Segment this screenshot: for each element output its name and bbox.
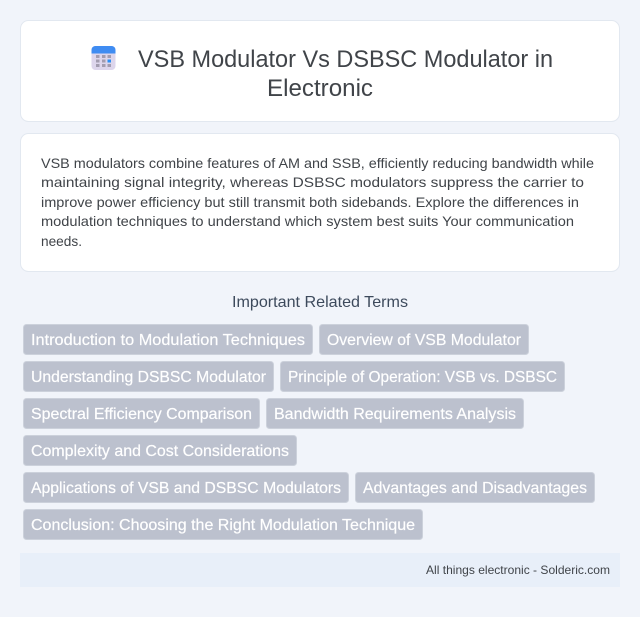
text block: description: maintaining signal integrity, whereas DSBSC modulators suppress the carrier to	[41, 174, 584, 190]
tag: Advantages and Disadvantages	[363, 480, 587, 497]
tag	[356, 472, 594, 502]
text block: description: needs.	[41, 233, 82, 249]
text block: description: modulation techniques to understand which system best suits Your communication	[41, 213, 574, 229]
tag	[320, 324, 528, 354]
icon: calendar	[92, 46, 116, 70]
tag: Understanding DSBSC Modulator	[31, 369, 267, 386]
tag: Overview of VSB Modulator	[327, 332, 522, 349]
text block: description	[41, 155, 594, 249]
panel: description	[20, 134, 620, 272]
tag	[280, 362, 564, 392]
tag	[24, 398, 260, 428]
tag	[24, 436, 296, 466]
heading: title: Electronic	[267, 75, 373, 102]
heading: important related terms: Important Related Terms	[232, 294, 408, 311]
tag: Spectral Efficiency Comparison	[31, 406, 252, 423]
heading: title	[138, 46, 553, 102]
text block: description: VSB modulators combine features of AM and SSB, efficiently reducing bandwidth while	[41, 155, 594, 171]
tag: Complexity and Cost Considerations	[31, 443, 289, 460]
panel: title card	[20, 20, 620, 122]
tag	[24, 472, 348, 502]
heading: title: VSB Modulator Vs DSBSC Modulator in	[138, 46, 553, 73]
tag	[24, 324, 312, 354]
tag	[24, 362, 274, 392]
tag: Principle of Operation: VSB vs. DSBSC	[288, 369, 557, 386]
tag list	[24, 324, 594, 540]
tag	[24, 510, 422, 540]
tag: Conclusion: Choosing the Right Modulation Technique	[31, 517, 415, 534]
footer	[20, 553, 620, 587]
tag: Bandwidth Requirements Analysis	[274, 406, 516, 423]
tag: Applications of VSB and DSBSC Modulators	[31, 480, 341, 497]
tag: Introduction to Modulation Techniques	[31, 332, 305, 349]
footer: All things electronic - Solderic.com	[426, 563, 610, 577]
tag	[266, 398, 524, 428]
text block: description: improve power efficiency but still transmit both sidebands. Explore the differences in	[41, 194, 579, 210]
